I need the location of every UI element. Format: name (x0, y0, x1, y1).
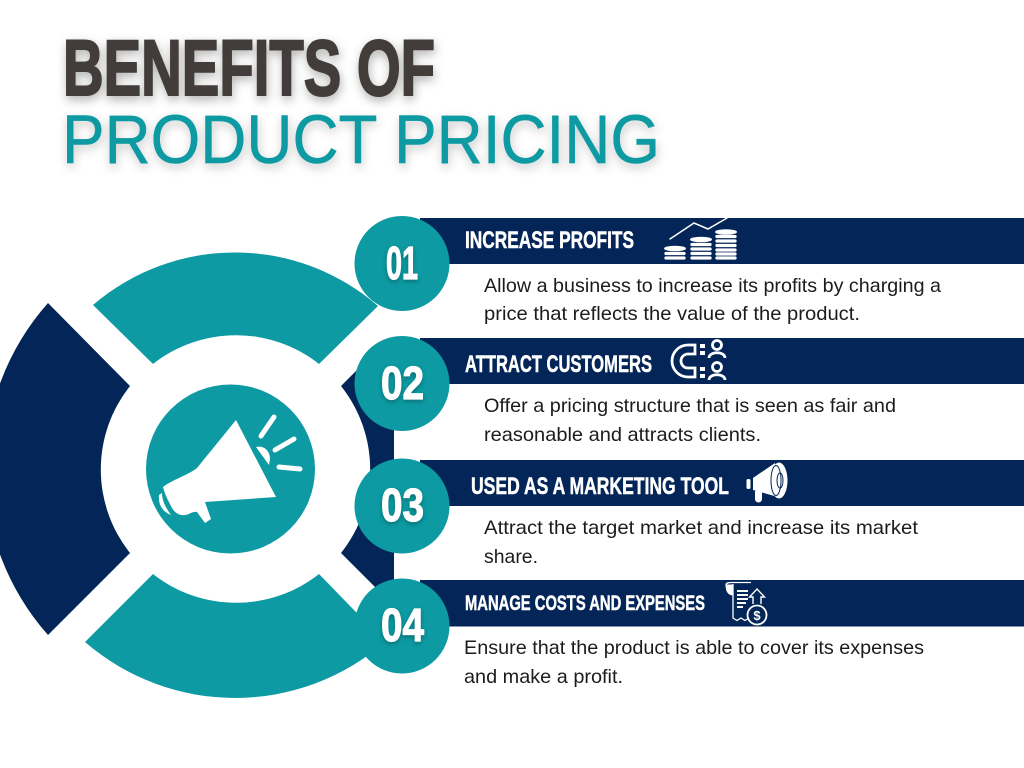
heading: increase profits: INCREASE PROFITS (465, 227, 634, 254)
number badge 04 (354, 578, 450, 674)
body text 2 (484, 395, 896, 446)
body text 4: Ensure that the product is able to cover its expenses (464, 637, 924, 659)
icon: receipt with dollar coin: $ (753, 608, 761, 623)
ring diagram (0, 252, 394, 698)
body text 2: Offer a pricing structure that is seen as fair and (484, 395, 896, 417)
icon: bullhorn (746, 462, 788, 503)
title (62, 23, 660, 178)
segment: right navy (341, 338, 394, 606)
body text 3: share. (484, 546, 538, 568)
heading: attract customers: ATTRACT CUSTOMERS (465, 351, 652, 378)
number badge 04: 04 (381, 599, 424, 651)
segment: left navy (0, 303, 130, 635)
body text 2: reasonable and attracts clients. (484, 424, 761, 446)
body text 1 (484, 275, 941, 325)
body text 3: Attract the target market and increase its market (484, 517, 919, 539)
body text 1: Allow a business to increase its profits by charging a (484, 275, 941, 297)
number badge 02 (354, 336, 450, 431)
icon: megaphone (159, 417, 300, 523)
header bar 2 (420, 338, 1024, 384)
title: PRODUCT PRICING (62, 101, 660, 178)
body text 1: price that reflects the value of the product. (484, 303, 860, 325)
body text 4 (464, 637, 924, 688)
body text 3 (484, 517, 919, 568)
number badge 01 (354, 216, 450, 311)
number badge 02: 02 (381, 357, 424, 409)
central circle with megaphone (146, 384, 315, 554)
header bar 1 (420, 218, 1024, 264)
title: BENEFITS OF (63, 23, 435, 112)
segment: top teal (93, 252, 378, 364)
segment: bottom teal (85, 574, 385, 698)
number badge 03: 03 (381, 479, 424, 531)
body text 4: and make a profit. (464, 666, 623, 688)
number badge 01: 01 (386, 237, 418, 289)
icon: magnet attracting people (672, 340, 725, 380)
heading: used as a marketing tool: USED AS A MARKETING TOOL (471, 473, 729, 500)
icon: receipt with dollar coin (726, 582, 766, 624)
header bar 3 (420, 460, 1024, 506)
heading: manage costs and expenses: MANAGE COSTS AND EXPENSES (465, 592, 705, 615)
header bar 4 (420, 580, 1024, 626)
icon: coin stacks with growth line (664, 218, 737, 258)
number badge 03 (354, 458, 450, 554)
